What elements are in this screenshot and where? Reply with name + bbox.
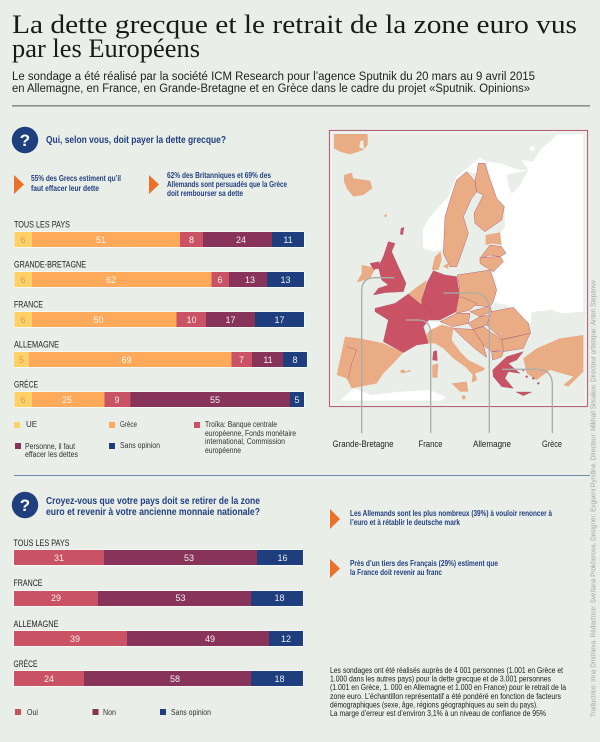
- row: france: FRANCE: [14, 300, 43, 310]
- methodology note: 1.000 dans les autres pays) pour la dette grecque et de 3.001 personnes: [330, 674, 551, 684]
- legend: qui doit payer: [14, 420, 296, 459]
- legend: retrait: [15, 708, 211, 717]
- row: allemagne: 39: [70, 634, 80, 644]
- row: tous les pays: 31: [54, 553, 64, 563]
- row: france: 53: [175, 593, 186, 603]
- credits: Traductrice: Irina Dmitrieva. Rédactrice: Svetlana Prokhorova. Designer: Evgueni Ryndine. Directeur: Mikhail Simakov. Directeur artistique: Anton Stepanov: [590, 280, 598, 717]
- row: tous les pays: 6: [20, 235, 26, 245]
- map labels: [332, 439, 562, 449]
- row: allemagne: [13, 619, 304, 647]
- map labels: Grèce: [542, 439, 562, 449]
- map frame: [330, 130, 588, 406]
- row: france: [14, 300, 305, 328]
- callout: Grecs: faut effacer leur dette: [31, 184, 99, 193]
- surveyed countries: [370, 227, 539, 396]
- legend: qui doit payer: Grèce: [120, 420, 137, 429]
- methodology note: [330, 666, 567, 718]
- legend: qui doit payer: européenne: [205, 446, 241, 455]
- row: allemagne: ALLEMAGNE: [14, 619, 58, 630]
- row: france: 29: [51, 593, 61, 603]
- legend: retrait: Non: [103, 708, 116, 717]
- callout: Allemands: l’euro et à rétablir le deutsche mark: [350, 518, 460, 527]
- row: grande-bretagne: 13: [245, 275, 255, 285]
- row: france: 17: [274, 315, 285, 325]
- row: grèce: GRÈCE: [14, 659, 38, 670]
- legend: qui doit payer: Troïka: Banque centrale: [205, 420, 277, 429]
- row: france: 18: [274, 593, 285, 603]
- callout: Grecs: [14, 174, 121, 194]
- legend: qui doit payer: effacer les dettes: [25, 450, 78, 459]
- row: grande-bretagne: [14, 260, 305, 288]
- row: tous les pays: 11: [283, 235, 293, 245]
- row: allemagne: 49: [205, 634, 215, 644]
- row: tous les pays: [13, 538, 304, 566]
- title: La dette grecque et le retrait de la zone euro vus: [12, 9, 577, 39]
- sea cut-outs: [507, 170, 553, 337]
- row: grèce: 24: [44, 674, 54, 684]
- callout: Britanniques: [149, 171, 287, 198]
- row: grèce: [14, 380, 305, 408]
- callout: Français: la France doit revenir au franc: [350, 568, 442, 577]
- map labels: Allemagne: [473, 439, 511, 449]
- row: grèce: GRÈCE: [14, 380, 38, 390]
- row: grèce: 5: [294, 395, 300, 405]
- callout: Français: [330, 559, 498, 578]
- row: france: 17: [225, 315, 236, 325]
- row: tous les pays: 8: [189, 235, 194, 245]
- icon: question 2: ?: [20, 496, 30, 515]
- row: grèce: 58: [170, 674, 180, 684]
- subtitle: [12, 71, 535, 95]
- row: grande-bretagne: GRANDE-BRETAGNE: [14, 260, 86, 270]
- methodology note: La marge d’erreur est d’environ 3,1% à un niveau de confiance de 95%: [330, 709, 546, 718]
- heading: question 2: Croyez-vous que votre pays doit se retirer de la zone: [46, 496, 260, 507]
- heading: question 2: euro et revenir à votre ancienne monnaie nationale?: [46, 507, 260, 518]
- title: par les Européens: [12, 33, 200, 63]
- line: Allemagne: [444, 293, 489, 433]
- methodology note: (1.001 en Grèce, 1. 000 en Allemagne et 1.000 en France) pour le retrait de la: [330, 683, 567, 692]
- row: grande-bretagne: 13: [280, 275, 291, 285]
- icon: question 1: [12, 127, 38, 153]
- row: allemagne: [14, 340, 308, 368]
- row: allemagne: 69: [121, 355, 132, 365]
- bar chart: qui doit payer: [14, 220, 308, 408]
- row: grèce: 9: [114, 395, 120, 405]
- row: allemagne: 7: [239, 355, 244, 365]
- row: tous les pays: [14, 220, 305, 248]
- row: grèce: 6: [20, 395, 26, 405]
- row: allemagne: 11: [263, 355, 273, 365]
- row: grèce: [13, 659, 304, 687]
- legend: qui doit payer: international, Commission: [205, 437, 285, 446]
- row: grande-bretagne: 6: [20, 275, 26, 285]
- callout: Britanniques: Allemands sont persuadés que la Grèce: [167, 180, 287, 189]
- icon: question 1: ?: [20, 131, 30, 150]
- callout: Français: Près d’un tiers des Français (29%) estiment que: [350, 559, 498, 568]
- legend: retrait: Oui: [27, 708, 38, 717]
- row: tous les pays: 16: [277, 553, 288, 563]
- bar chart: retrait de la zone euro: [13, 538, 304, 687]
- callout: Britanniques: 62% des Britanniques et 69% des: [167, 171, 271, 180]
- row: france: 6: [20, 315, 26, 325]
- legend: qui doit payer: européenne, Fonds monétaire: [205, 429, 296, 438]
- row: tous les pays: 51: [96, 235, 106, 245]
- callout: Britanniques: doit rembourser sa dette: [167, 189, 243, 198]
- row: allemagne: 8: [292, 355, 298, 365]
- line: France: [407, 320, 431, 433]
- map of Europe: [330, 130, 588, 433]
- title: [12, 9, 577, 63]
- callout: Allemands: [330, 509, 552, 529]
- row: france: [13, 578, 304, 607]
- row: grèce: 55: [210, 395, 220, 405]
- line: Grèce: [503, 369, 552, 433]
- row: tous les pays: 24: [236, 235, 246, 245]
- methodology note: zone euro. L’échantillon représentatif a été pondéré en fonction de facteurs: [330, 692, 561, 701]
- heading: question 2: [46, 496, 260, 518]
- row: france: 50: [93, 315, 104, 325]
- row: allemagne: 5: [19, 355, 24, 365]
- row: tous les pays: TOUS LES PAYS: [14, 538, 70, 549]
- row: allemagne: ALLEMAGNE: [14, 340, 59, 350]
- row: france: 10: [186, 315, 197, 325]
- row: tous les pays: TOUS LES PAYS: [14, 220, 70, 230]
- legend: qui doit payer: Personne, il faut: [25, 442, 76, 451]
- callout: Grecs: 55% des Grecs estiment qu’il: [31, 174, 121, 183]
- methodology note: démographiques (sexe, âge, régions géographiques au sein du pays).: [330, 700, 538, 710]
- heading: question 1: Qui, selon vous, doit payer la dette grecque?: [46, 135, 226, 146]
- map labels: France: [418, 439, 442, 449]
- non-surveyed land: [340, 134, 583, 401]
- subtitle: Le sondage a été réalisé par la société ICM Research pour l’agence Sputnik du 20 mars au 9 avril 2015: [12, 71, 535, 83]
- row: allemagne: 12: [281, 634, 291, 644]
- row: tous les pays: 53: [184, 553, 194, 563]
- map labels: Grande-Bretagne: [332, 439, 394, 449]
- callout lines: [362, 278, 552, 433]
- callout: Allemands: Les Allemands sont les plus nombreux (39%) à vouloir renoncer à: [350, 509, 552, 518]
- row: france: FRANCE: [14, 578, 42, 589]
- row: grande-bretagne: 62: [106, 275, 116, 285]
- legend: qui doit payer: UE: [26, 420, 37, 429]
- legend: qui doit payer: Sans opinion: [120, 441, 160, 450]
- row: grèce: 18: [274, 674, 285, 684]
- legend: retrait: Sans opinion: [171, 708, 211, 717]
- row: grande-bretagne: 6: [217, 275, 223, 285]
- methodology note: Les sondages ont été réalisés auprès de 4 001 personnes (1.001 en Grèce et: [330, 666, 564, 675]
- icon: question 2: [12, 492, 38, 518]
- row: grèce: 25: [62, 395, 72, 405]
- surveyed neutral countries: [334, 134, 583, 399]
- subtitle: en Allemagne, en France, en Grande-Bretagne et en Grèce dans le cadre du projet «Sputnik. Opinions»: [12, 83, 530, 95]
- line: Grande-Bretagne: [362, 278, 394, 433]
